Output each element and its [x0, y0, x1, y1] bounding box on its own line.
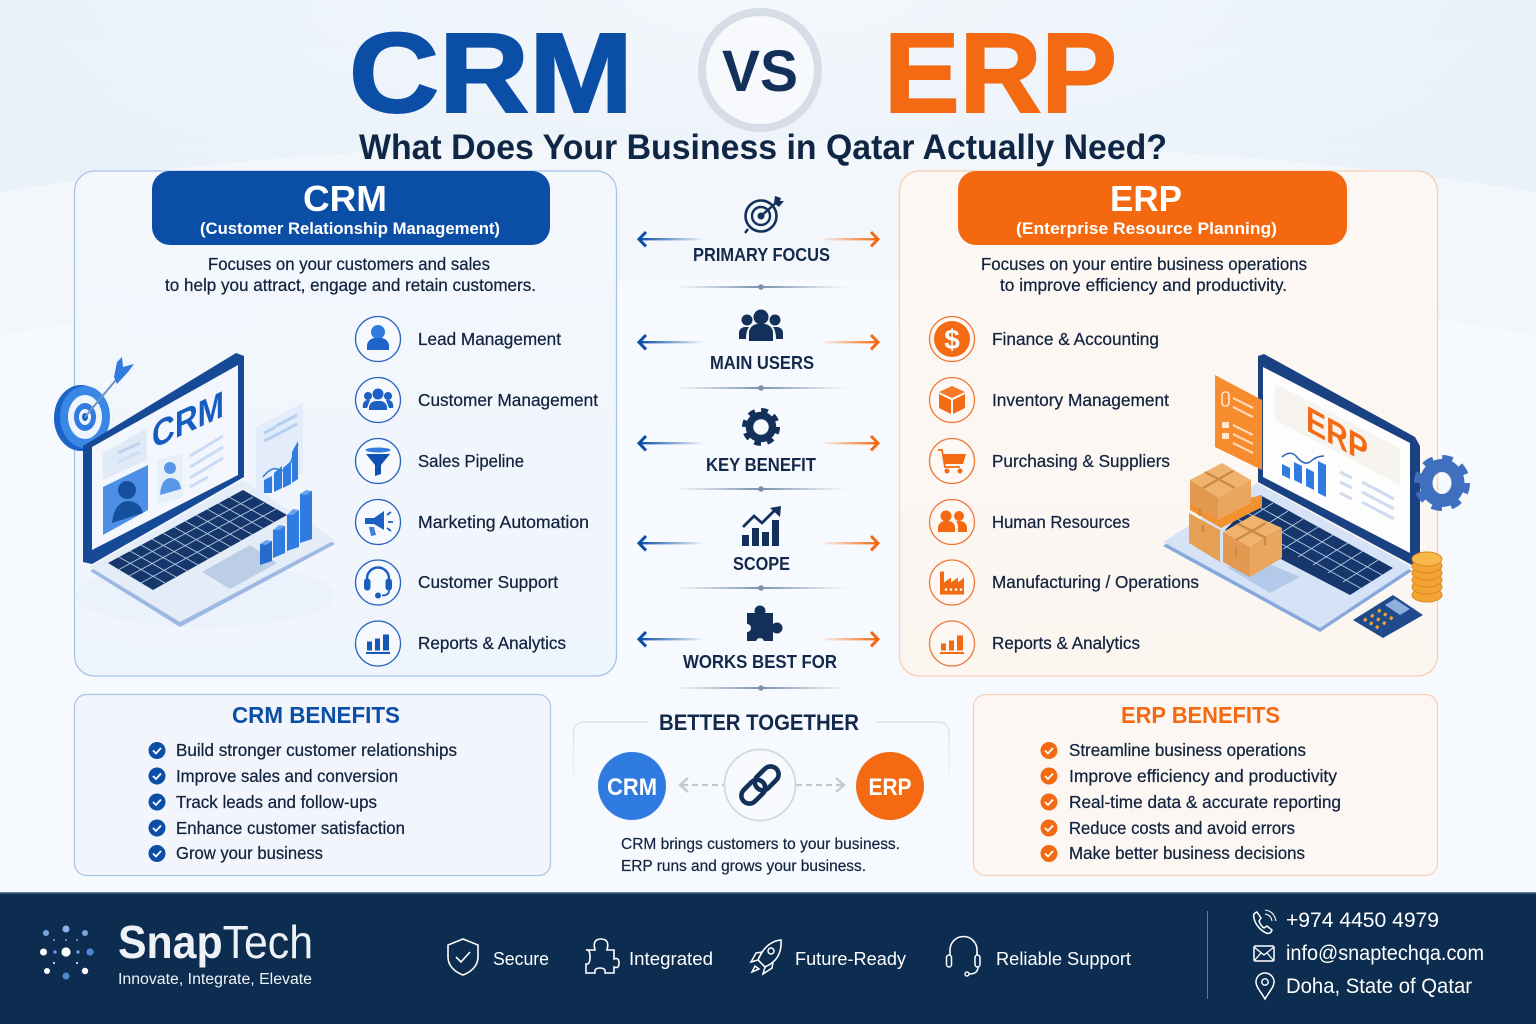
- 3D bars: [260, 490, 312, 565]
- gear icon: [1418, 459, 1466, 507]
- contact: phone: +974 4450 4979: [1286, 909, 1439, 932]
- badge: Reliable Support: Reliable Support: [996, 948, 1131, 969]
- coin stack: [1412, 552, 1442, 602]
- caption: [621, 836, 900, 875]
- Lead Management: [356, 316, 561, 362]
- badge: Future-Ready: Future-Ready: [795, 948, 907, 969]
- Marketing Automation: [356, 500, 589, 544]
- ERP header: ERP: [1110, 178, 1182, 219]
- brand logo: [40, 926, 94, 980]
- ERP circle: ERP: [868, 774, 912, 801]
- link icon: [724, 750, 796, 820]
- Customer Support: Customer Support: [418, 572, 558, 592]
- CRM description: Focuses on your customers and sales: [208, 254, 490, 274]
- panel: better together: [574, 710, 949, 875]
- subtitle: What Does Your Business in Qatar Actually Need?: [359, 128, 1167, 167]
- keyboard: [1225, 495, 1393, 595]
- CRM header: (Customer Relationship Management): [200, 219, 500, 238]
- arrows: [639, 632, 878, 646]
- panel: ERP: [900, 171, 1466, 676]
- benefit list: Streamline business operations: [1069, 740, 1306, 760]
- icon: growth chart: [742, 506, 781, 546]
- CRM circle: [598, 752, 666, 820]
- brand name: SnapTech: [118, 916, 313, 968]
- floating chart card: [256, 403, 303, 497]
- touchpad: [1227, 560, 1300, 593]
- laptop screen: [83, 353, 244, 564]
- arrows: [639, 536, 878, 550]
- label: PRIMARY FOCUS: [693, 244, 830, 265]
- connector arrows: [680, 778, 844, 792]
- CRM feature list: [356, 316, 598, 666]
- caption: CRM brings customers to your business.: [621, 836, 900, 853]
- benefit list: Reduce costs and avoid errors: [1069, 818, 1295, 838]
- laptop base: [1163, 487, 1412, 632]
- heading: BETTER TOGETHER: [659, 710, 859, 735]
- CRM circle: CRM: [607, 774, 657, 801]
- Customer Management: Customer Management: [418, 390, 598, 410]
- benefit list: Enhance customer satisfaction: [176, 818, 405, 838]
- keyboard: [108, 490, 287, 590]
- CRM description: [165, 254, 536, 295]
- brand name: Innovate, Integrate, Elevate: [118, 971, 312, 988]
- ERP header: (Enterprise Resource Planning): [1016, 219, 1277, 238]
- title word CRM: CRM: [349, 10, 633, 136]
- row: Scope: [639, 506, 878, 574]
- benefit list: Track leads and follow-ups: [176, 792, 377, 812]
- CRM header: CRM: [303, 178, 387, 219]
- arrows: [639, 436, 878, 450]
- Manufacturing / Operations: Manufacturing / Operations: [992, 572, 1199, 592]
- Human Resources: [930, 500, 1130, 544]
- title word ERP: ERP: [884, 10, 1117, 136]
- benefit list: [1040, 740, 1341, 863]
- Sales Pipeline: [356, 438, 524, 484]
- badge: Integrated: Integrated: [629, 948, 713, 969]
- row: Key Benefit: [639, 411, 878, 475]
- benefit list: Improve sales and conversion: [176, 766, 398, 786]
- Customer Management: [356, 378, 598, 422]
- footer: [0, 892, 1536, 1024]
- Reports & Analytics: Reports & Analytics: [992, 633, 1140, 653]
- VS badge: VS: [722, 39, 798, 104]
- Inventory Management: [930, 378, 1169, 422]
- touchpad: [202, 545, 277, 589]
- Marketing Automation: Marketing Automation: [418, 512, 589, 532]
- CRM laptop illustration: [54, 353, 335, 627]
- Purchasing & Suppliers: Purchasing & Suppliers: [992, 451, 1170, 471]
- ERP circle: [856, 752, 924, 820]
- label: SCOPE: [733, 553, 790, 574]
- calculator: [1353, 595, 1423, 638]
- Reports & Analytics: [356, 621, 566, 666]
- Sales Pipeline: Sales Pipeline: [418, 451, 524, 471]
- Inventory Management: Inventory Management: [992, 390, 1169, 410]
- benefit list: Grow your business: [176, 843, 323, 863]
- Reports & Analytics: [930, 621, 1140, 666]
- contact: email: info@snaptechqa.com: [1286, 942, 1484, 965]
- VS badge: [702, 12, 818, 128]
- CRM description: to help you attract, engage and retain customers.: [165, 275, 536, 295]
- badge: Reliable Support: [946, 936, 1131, 976]
- benefit list: Build stronger customer relationships: [176, 740, 457, 760]
- comparison column: [639, 196, 878, 691]
- row: Works Best For: [639, 606, 878, 672]
- benefit list: [148, 740, 457, 863]
- row: Primary Focus: [639, 196, 878, 265]
- icon: target: [745, 196, 784, 233]
- Purchasing & Suppliers: [930, 438, 1170, 484]
- ERP feature list: [930, 316, 1199, 666]
- label: KEY BENEFIT: [706, 454, 817, 475]
- arrows: [639, 335, 878, 349]
- ERP description: Focuses on your entire business operations: [981, 254, 1307, 274]
- benefit list: Improve efficiency and productivity: [1069, 766, 1337, 786]
- orange clipboard card: [1215, 375, 1262, 470]
- Finance & Accounting: [930, 316, 1159, 362]
- caption: ERP runs and grows your business.: [621, 858, 866, 875]
- badge: Secure: [448, 939, 549, 975]
- badge: Secure: Secure: [493, 948, 549, 969]
- Human Resources: Human Resources: [992, 512, 1130, 532]
- cardboard boxes: [1189, 463, 1282, 577]
- heading: ERP BENEFITS: [1121, 702, 1280, 728]
- screen ERP text: ERP: [1306, 398, 1368, 472]
- CRM header: [152, 171, 550, 245]
- panel: CRM: [54, 171, 616, 676]
- label: WORKS BEST FOR: [683, 651, 837, 672]
- label: MAIN USERS: [710, 352, 814, 373]
- panel: CRM benefits: [74, 694, 550, 876]
- benefit list: Make better business decisions: [1069, 843, 1305, 863]
- badge: Future-Ready: [751, 940, 907, 974]
- Manufacturing / Operations: [930, 560, 1199, 605]
- ERP header: [958, 171, 1347, 245]
- laptop screen: [1258, 354, 1420, 569]
- badge: Integrated: [586, 939, 713, 973]
- panel: ERP benefits: [974, 694, 1438, 876]
- Reports & Analytics: Reports & Analytics: [418, 633, 566, 653]
- Finance & Accounting: $: [944, 324, 960, 355]
- ERP laptop illustration: [1163, 354, 1466, 638]
- icon: gear: [745, 411, 777, 443]
- icon: users: [739, 310, 783, 341]
- laptop base: [90, 484, 335, 627]
- heading: CRM BENEFITS: [232, 702, 400, 728]
- contact: location: Doha, State of Qatar: [1286, 975, 1472, 998]
- benefit list: Real-time data & accurate reporting: [1069, 792, 1341, 812]
- arrows: [639, 232, 878, 246]
- ERP description: to improve efficiency and productivity.: [1000, 275, 1287, 295]
- Customer Support: [356, 560, 558, 605]
- title: [349, 10, 1167, 167]
- screen CRM text: CRM: [152, 384, 224, 458]
- icon: puzzle: [743, 606, 782, 646]
- ERP description: [981, 254, 1307, 295]
- row: Main Users: [639, 310, 878, 373]
- target icon: [54, 357, 134, 451]
- Finance & Accounting: Finance & Accounting: [992, 329, 1159, 349]
- Lead Management: Lead Management: [418, 329, 561, 349]
